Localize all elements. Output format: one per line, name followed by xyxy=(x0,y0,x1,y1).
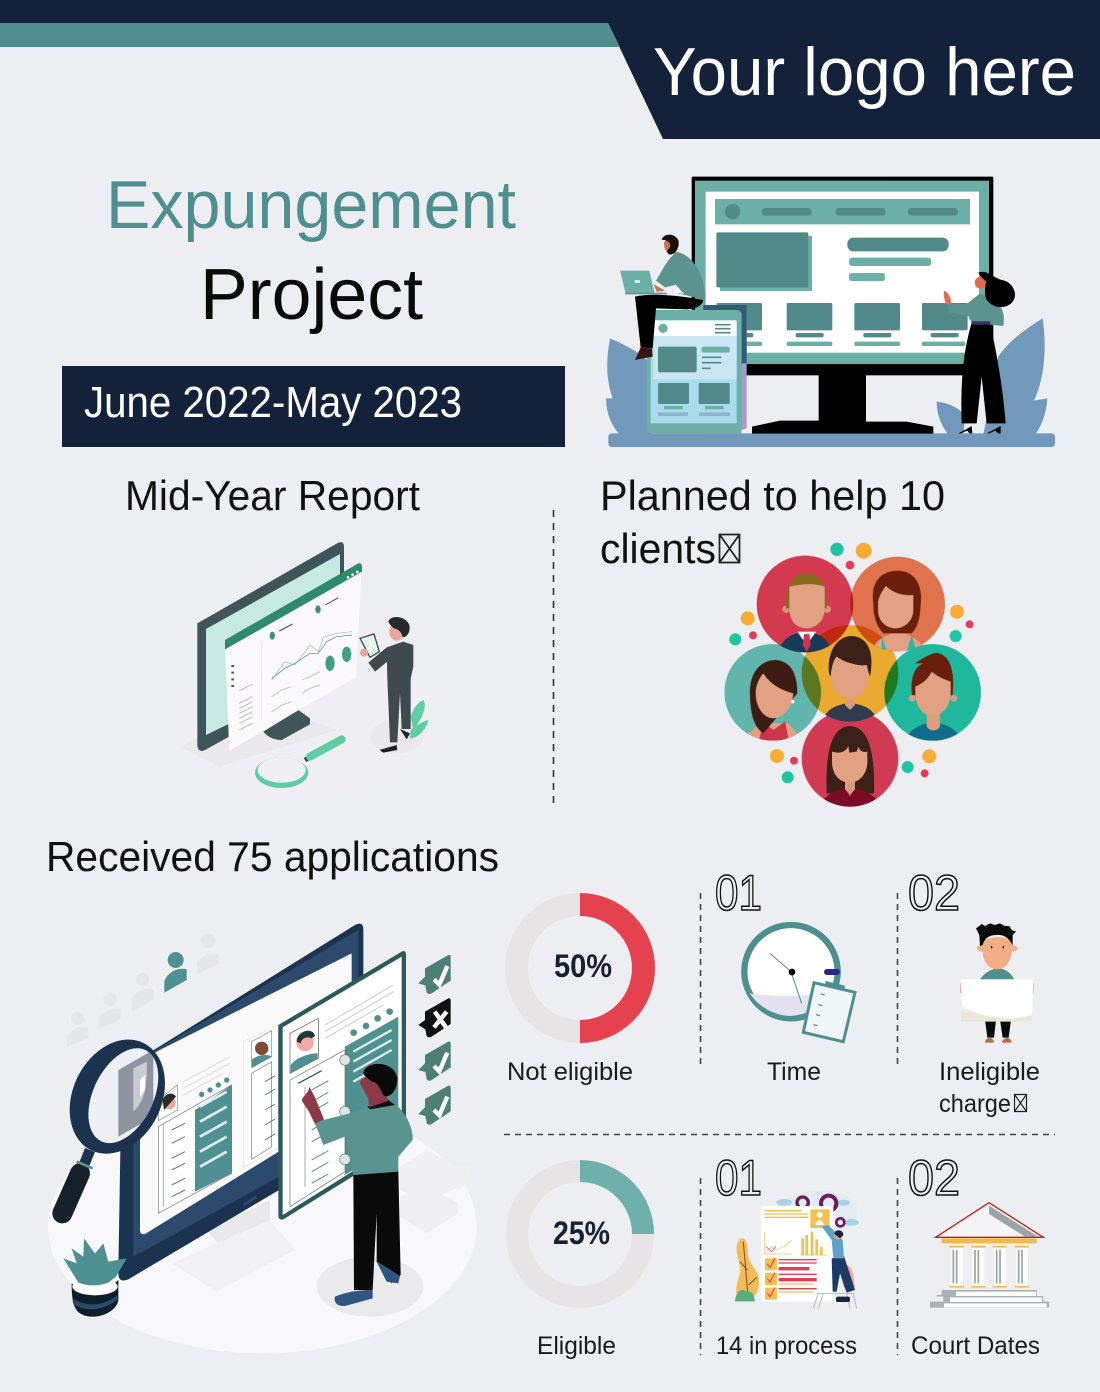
donut chart: 50% not eligible xyxy=(516,904,644,1032)
decorative dots xyxy=(729,543,974,783)
heading: Received 75 applications: Received 75 applications xyxy=(46,833,499,880)
number 01 second row: 01 xyxy=(715,1150,762,1206)
front CV panel xyxy=(278,951,406,1220)
title: Expungement: Expungement xyxy=(106,167,516,243)
donut chart: 25% eligible xyxy=(517,1171,643,1297)
logo placeholder text: Your logo here xyxy=(653,34,1076,110)
person: woman bottom xyxy=(823,726,877,810)
number 02: 02 xyxy=(908,865,960,921)
donut chart: 25% eligible: 25% xyxy=(553,1215,610,1251)
icon: clock and clipboard xyxy=(744,925,855,1042)
icon: tablet xyxy=(647,305,747,433)
icon: woman presenting xyxy=(944,272,1015,433)
number 01: 01 xyxy=(715,865,762,921)
dashed divider: first column xyxy=(700,893,898,1068)
icon: worker updating report board xyxy=(735,1191,859,1308)
text: Planned to help 10 clients: Planned to help 10 xyxy=(600,472,945,519)
date banner: June 2022-May 2023 xyxy=(84,378,462,427)
number 02 second row: 02 xyxy=(908,1150,960,1206)
label: Eligible: Eligible xyxy=(537,1332,616,1360)
donut chart: 50% not eligible: 50% xyxy=(554,948,612,984)
label: Ineligible charge: charge xyxy=(939,1090,1011,1118)
icon: potted plant xyxy=(63,1238,127,1317)
dashed divider vertical xyxy=(552,510,554,808)
icon: magnifier xyxy=(255,739,342,788)
label: Ineligible charge xyxy=(939,1058,1040,1118)
faint boxes xyxy=(400,1150,472,1233)
dashed divider: second row columns xyxy=(700,1178,898,1355)
label: Not eligible: Not eligible xyxy=(507,1058,633,1086)
illustration: reviewing CV applications xyxy=(48,924,477,1353)
monitor xyxy=(118,924,363,1280)
icon: courthouse xyxy=(930,1203,1049,1308)
monitor stand xyxy=(207,1200,270,1253)
icon: magnifying glass xyxy=(52,1040,165,1224)
title: Project: Project xyxy=(200,255,423,335)
illustration: analytics dashboard xyxy=(173,542,433,800)
illustration: group of six people xyxy=(724,543,981,810)
text: Planned to help 10 clients xyxy=(600,472,945,572)
icon: person holding blank sign xyxy=(960,923,1034,1043)
person: man right xyxy=(908,652,958,741)
person: man top left xyxy=(778,573,833,653)
dashed divider horizontal xyxy=(504,1134,1055,1136)
label: Ineligible charge: Ineligible xyxy=(939,1058,1040,1086)
icon: man with laptop xyxy=(620,235,705,360)
header band xyxy=(0,0,1100,139)
person: woman top right xyxy=(873,571,923,657)
person pointing at panel xyxy=(302,1064,413,1306)
person: man centre xyxy=(824,636,876,727)
user icons row xyxy=(67,933,219,1047)
date banner xyxy=(62,366,565,447)
person: woman left xyxy=(747,660,798,743)
label: 14 in process: 14 in process xyxy=(716,1332,857,1360)
label: Court Dates: Court Dates xyxy=(911,1332,1040,1360)
icon: man with clipboard xyxy=(360,617,428,753)
text: Planned to help 10 clients: clients xyxy=(600,525,716,572)
label: Time: Time xyxy=(767,1058,821,1086)
status badges xyxy=(418,955,451,1125)
heading: Mid-Year Report: Mid-Year Report xyxy=(125,472,420,519)
illustration: website on monitor with two people xyxy=(606,177,1055,447)
